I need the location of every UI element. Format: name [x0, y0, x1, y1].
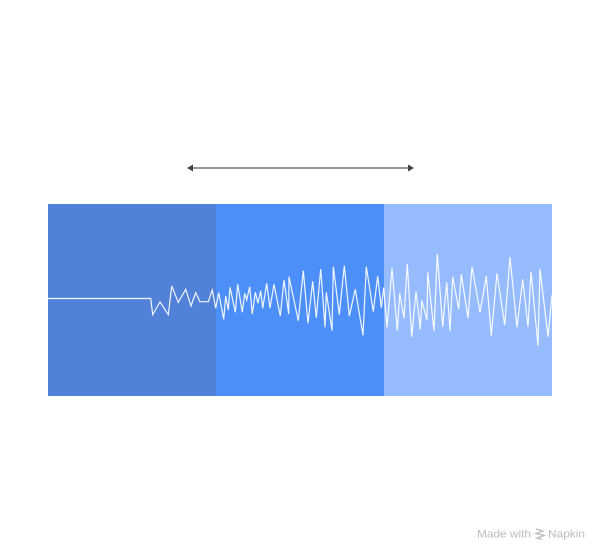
waveform line [48, 254, 552, 346]
double-headed arrow [187, 164, 414, 172]
icon: Napkin logo [536, 529, 544, 540]
panel: middle segment [216, 204, 384, 396]
watermark: Made with Napkin: Napkin [548, 528, 585, 540]
watermark: Made with Napkin [477, 528, 585, 540]
watermark: Made with Napkin: Made with [477, 528, 531, 540]
panel: left dark segment [48, 204, 216, 396]
panel: right light segment [384, 204, 552, 396]
